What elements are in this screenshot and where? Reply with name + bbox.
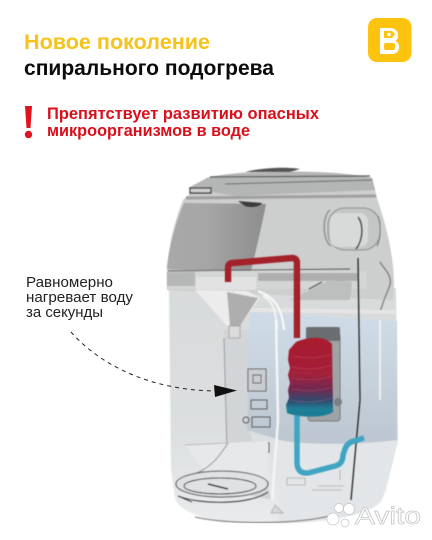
icon: red exclamation mark (25, 106, 32, 138)
callout text: нагревает воду (26, 290, 134, 306)
device right clear base (278, 440, 398, 523)
tank top rim (250, 310, 395, 312)
blue cold water pipe (297, 415, 364, 473)
funnel (195, 290, 284, 338)
base details (271, 470, 344, 513)
interior vertical divider lines (224, 258, 380, 500)
device dark lid shadow (238, 201, 262, 207)
base bottom edge (195, 516, 330, 522)
device inner column (224, 330, 272, 500)
callout text: Равномерно (26, 275, 113, 291)
device dark gray reservoir panel (167, 203, 266, 271)
heating coil (286, 338, 333, 417)
arrow: dashed pointer to heater (71, 332, 237, 397)
control electronics (243, 369, 270, 452)
warning text: микроорганизмов в воде (47, 122, 250, 140)
dispenser tray (176, 441, 268, 502)
title: black heading: спирального подогрева (24, 57, 274, 80)
device lid (186, 168, 376, 198)
illustration: water heater device (167, 168, 398, 524)
device upper light shell (167, 171, 394, 300)
device lower body (169, 288, 398, 524)
device middle band (167, 262, 390, 312)
device window handle (324, 208, 380, 250)
water tank (247, 312, 397, 444)
icon: brand logo (368, 18, 412, 62)
heater housing (306, 327, 342, 421)
warning text: Препятствует развитию опасных (47, 105, 320, 123)
red hot water pipe (228, 258, 297, 338)
watermark: Avito: Avito (355, 503, 421, 530)
callout text (26, 275, 134, 321)
watermark: Avito (327, 503, 421, 530)
warning text (47, 105, 320, 140)
title: yellow heading: Новое поколение (24, 31, 210, 54)
callout text: за секунды (26, 305, 103, 321)
